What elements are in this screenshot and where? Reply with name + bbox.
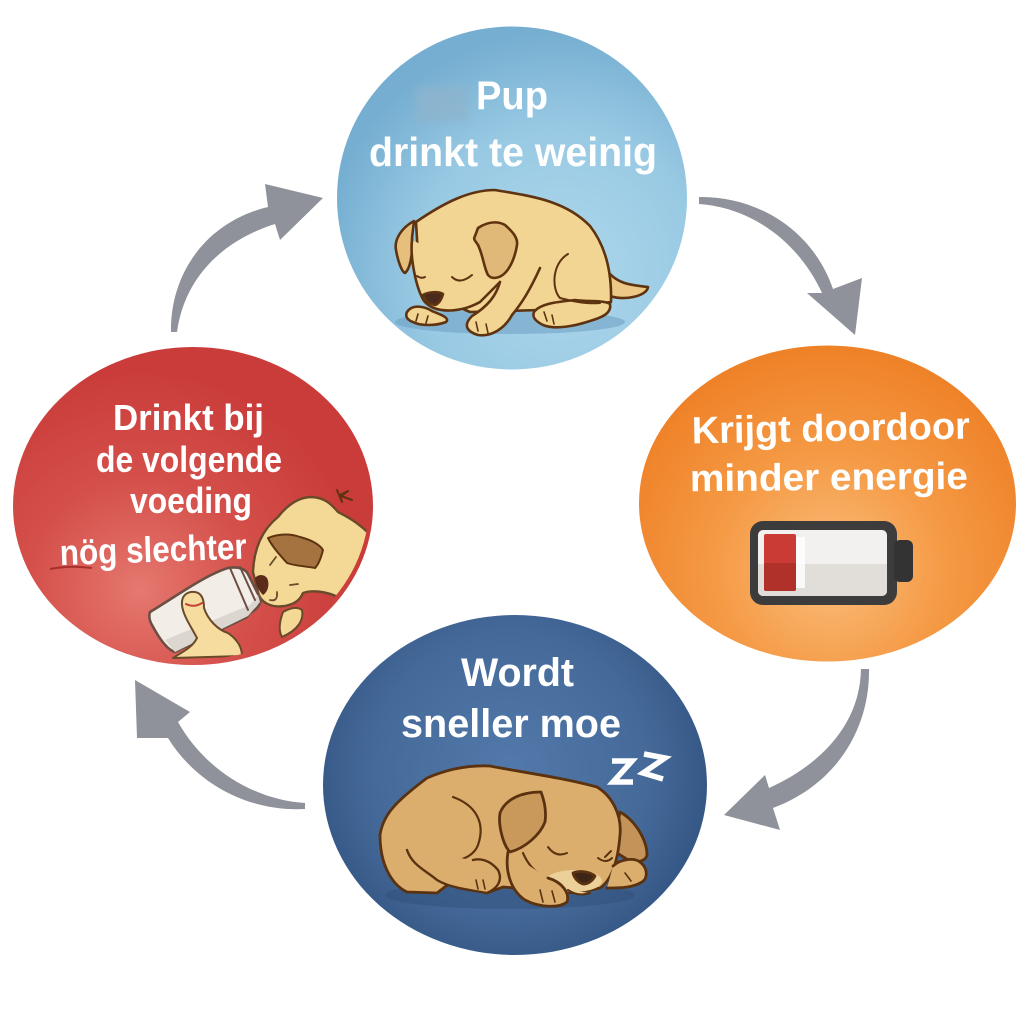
heading: minder energie: minder energie bbox=[690, 456, 968, 500]
heading: wordt sneller moe bbox=[401, 651, 621, 746]
icon: tired standing puppy bbox=[395, 190, 648, 335]
smudge behind heading bbox=[416, 86, 468, 122]
panel: drinkt bij de volgende voeding nog slechter bbox=[13, 347, 375, 665]
heading: wordt sneller moe: Wordt bbox=[461, 651, 574, 695]
heading: minder energie bbox=[690, 406, 970, 500]
heading: pup drinkt te weinig: Pup bbox=[476, 74, 548, 118]
heading: drinkt bij de volgende voeding nog slechter: nög slechter bbox=[59, 526, 247, 573]
heading: pup drinkt te weinig: drinkt te weinig bbox=[369, 129, 657, 175]
icon: sleeping puppy bbox=[380, 766, 647, 909]
heading: drinkt bij de volgende voeding nog slechter: de volgende bbox=[96, 439, 282, 480]
icon: z z bbox=[612, 754, 665, 782]
arrow: top to orange bbox=[699, 197, 862, 335]
heading: drinkt bij de volgende voeding nog slechter: Drinkt bij bbox=[113, 397, 264, 438]
arrow: navy to red bbox=[135, 680, 305, 809]
arrow: orange to navy bbox=[724, 669, 869, 830]
heading: drinkt bij de volgende voeding nog slechter: voeding bbox=[130, 480, 252, 521]
panel: krijgt doordoor minder energie bbox=[639, 346, 1016, 662]
panel: wordt sneller moe bbox=[323, 615, 707, 955]
heading: minder energie: Krijgt doordoor bbox=[691, 406, 970, 452]
icon: low battery bbox=[750, 521, 913, 605]
icon: puppy drinking from bottle bbox=[149, 490, 375, 658]
panel: pup drinkt te weinig bbox=[337, 26, 687, 370]
heading: pup drinkt te weinig bbox=[369, 74, 657, 175]
arrow: red to top bbox=[171, 184, 323, 332]
heading: drinkt bij de volgende voeding nog slechter bbox=[59, 397, 282, 573]
smudge under heading bbox=[50, 567, 92, 569]
heading: wordt sneller moe: sneller moe bbox=[401, 702, 621, 746]
